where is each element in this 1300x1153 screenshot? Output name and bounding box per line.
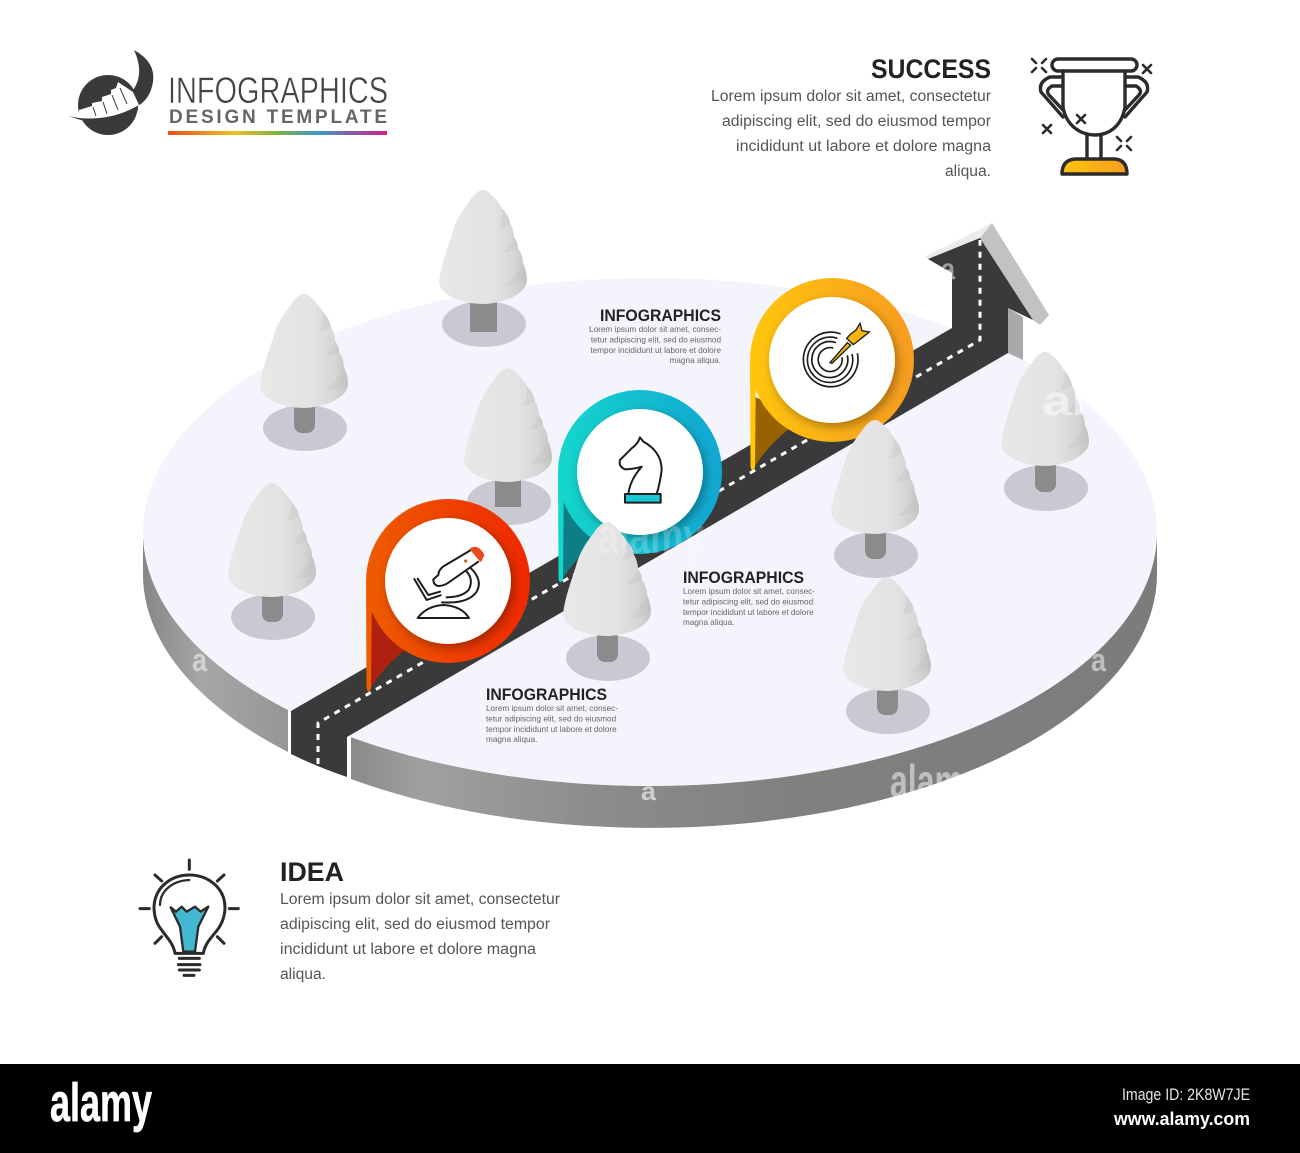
icon: target [803,323,869,387]
pin 2 tail strip [558,472,564,582]
website: www.alamy.com [1113,1109,1250,1129]
footer logo: alamy [50,1073,152,1133]
success body: incididunt ut labore et dolore magna [736,138,991,155]
disc side right [351,532,1157,828]
idea heading: IDEA [280,857,344,887]
watermark marks: a [941,253,955,286]
callout: step 1 text [486,685,618,744]
step 2 heading: INFOGRAPHICS [683,568,804,587]
step 3 body: tetur adipiscing elit, sed do eiusmod [591,336,721,344]
tree 6 [831,420,919,578]
tree shadows behind pins [228,190,552,640]
step 1 body: Lorem ipsum dolor sit amet, consec- [486,704,618,713]
road with arrow [291,223,1049,777]
isometric disc [143,278,1157,828]
success body: adipiscing elit, sed do eiusmod tempor [722,113,991,130]
pin 3 ring [750,278,914,442]
arrowhead bevel [980,223,1049,325]
step 1 body: tempor incididunt ut labore et dolore [486,725,617,734]
pin 2: chess knight [558,390,722,582]
success body: Lorem ipsum dolor sit amet, consectetur [711,88,991,105]
logo [69,50,388,135]
step 2 body: tempor incididunt ut labore et dolore [683,608,814,617]
tree 5 [563,522,651,681]
pin 2 disc [577,409,703,535]
road surface [291,238,1033,777]
rainbow bar [168,131,387,135]
watermark marks [192,253,1106,807]
foreground trees [563,352,1089,734]
pin 3 disc [769,297,895,423]
tree 1 [439,190,527,347]
tree 8 [843,577,931,734]
success body: aliqua. [945,163,991,180]
step 3 body: Lorem ipsum dolor sit amet, consec- [589,325,721,334]
watermark marks: alam [890,755,963,807]
tree 4 [228,483,316,640]
idea body: Lorem ipsum dolor sit amet, consectetur [280,891,560,908]
watermark marks: alamy [598,508,704,564]
step 3 heading: INFOGRAPHICS [600,306,721,325]
pin 1 ring [366,499,530,663]
step 1 body: magna aliqua. [486,735,537,744]
pin 1 tail strip [366,581,372,692]
tree 7 [1001,352,1089,511]
step 2 body: tetur adipiscing elit, sed do eiusmod [683,598,814,606]
arrow shaft side [1008,308,1023,360]
logo title: INFOGRAPHICS [168,70,388,111]
pin 1 tail flap [369,608,425,690]
footer bar [0,1064,1300,1153]
watermark marks: a [1091,642,1106,678]
idea body: aliqua. [280,966,326,983]
idea body: adipiscing elit, sed do eiusmod tempor [280,916,550,933]
road centre dashes [318,240,980,764]
watermark marks: a [641,776,657,806]
idea text block [280,857,560,983]
success text block [711,54,991,180]
step 2 body: Lorem ipsum dolor sit amet, consec- [683,587,815,596]
step 3 body: tempor incididunt ut labore et dolore [590,346,721,355]
watermark marks: al [1042,377,1086,424]
pin 3 tail strip [750,360,756,470]
disc top [143,278,1157,786]
icon: microscope [414,548,483,618]
step 1 heading: INFOGRAPHICS [486,685,607,704]
tree 3 [464,368,552,525]
pin 2 tail flap [561,499,617,581]
disc side left [143,532,288,752]
idea body: incididunt ut labore et dolore magna [280,941,536,958]
callout: step 2 text [683,568,815,627]
pin 3 tail flap [753,397,809,469]
arrowhead top bevel [924,223,992,259]
callout: step 3 text [589,306,721,365]
watermark marks: a [192,642,207,678]
icon: light bulb [140,860,238,975]
icon: trophy [1032,59,1151,174]
pin 3: target [750,278,914,470]
step 2 body: magna aliqua. [683,618,734,627]
logo icon [69,50,153,135]
pin 1: microscope [366,499,530,692]
step 3 body: magna aliqua. [670,356,721,365]
logo subtitle: DESIGN TEMPLATE [169,107,387,128]
icon: chess knight [620,437,662,503]
tree 2 [260,294,348,451]
image id: Image ID: 2K8W7JE [1122,1085,1250,1104]
pin 1 disc [385,518,511,644]
pin 2 ring [558,390,722,554]
success heading: SUCCESS [871,54,991,84]
step 1 body: tetur adipiscing elit, sed do eiusmod [486,714,617,724]
